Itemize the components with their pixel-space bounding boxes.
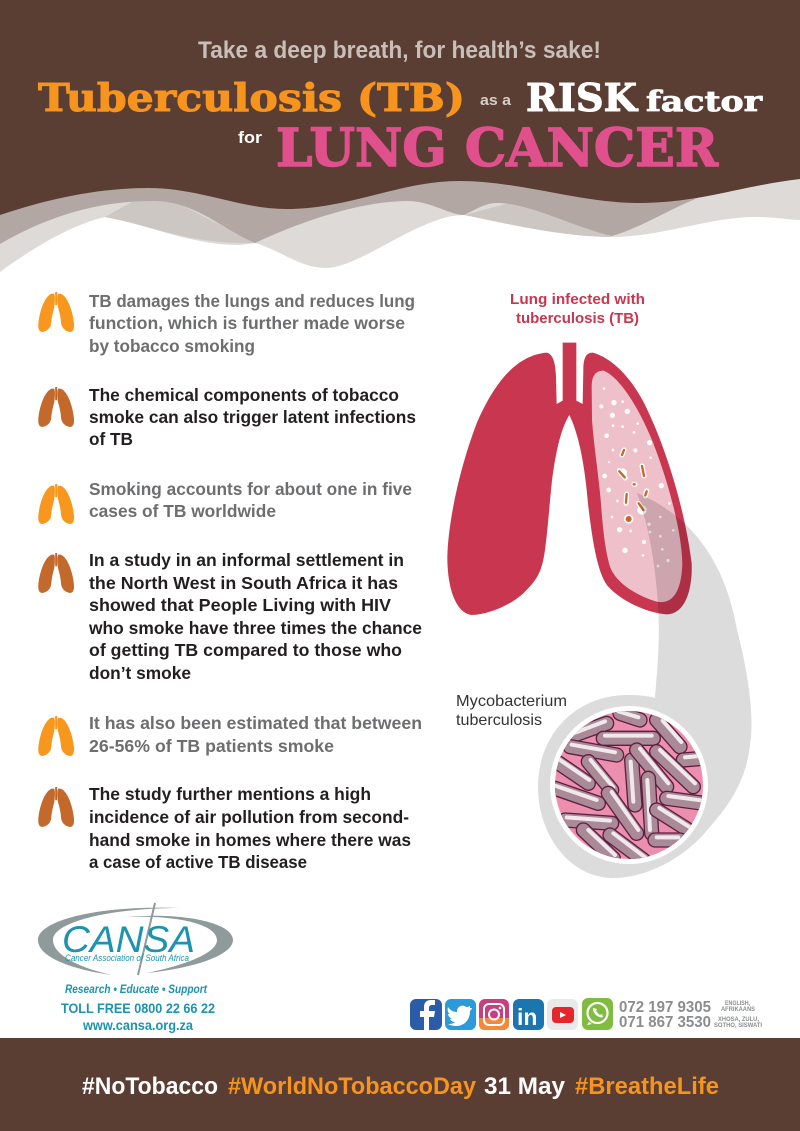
fact 1: function, which is further made worse bbox=[89, 313, 405, 333]
icon: lung 6 bbox=[38, 787, 74, 827]
contact numbers bbox=[619, 999, 762, 1031]
CANSA logo: www.cansa.org.za bbox=[82, 1017, 193, 1033]
footer hashtags: #BreatheLife bbox=[575, 1073, 719, 1100]
contact numbers: XHOSA, ZULU, bbox=[718, 1016, 759, 1023]
CANSA logo bbox=[38, 903, 233, 1033]
fact 4: don’t smoke bbox=[89, 663, 191, 683]
fact 4: of getting TB compared to those who bbox=[89, 640, 402, 660]
bacteria rods bbox=[555, 711, 703, 860]
fact 2: of TB bbox=[89, 429, 133, 449]
CANSA logo: CANSA bbox=[62, 919, 195, 960]
icon: lung 4 bbox=[38, 553, 74, 593]
title: LUNG CANCER bbox=[276, 118, 719, 179]
icon: twitter bbox=[445, 999, 476, 1030]
footer hashtags: #WorldNoTobaccoDay bbox=[228, 1073, 477, 1100]
icon: lung 1 bbox=[38, 292, 74, 332]
fact 2 bbox=[89, 385, 416, 449]
lung diagram heading: Lung infected with bbox=[510, 291, 645, 308]
contact numbers: AFRIKAANS bbox=[721, 1006, 756, 1013]
fact 3 bbox=[89, 479, 412, 521]
fact 5: 26-56% of TB patients smoke bbox=[89, 736, 334, 756]
fact 3: cases of TB worldwide bbox=[89, 501, 276, 521]
lung diagram heading bbox=[510, 291, 645, 327]
infected lung interior bbox=[592, 371, 682, 602]
icon: instagram bbox=[479, 999, 509, 1030]
icon: lung 3 bbox=[38, 484, 74, 524]
footer hashtags bbox=[82, 1073, 719, 1100]
fact 2: smoke can also trigger latent infections bbox=[89, 407, 416, 427]
fact 6: a case of active TB disease bbox=[89, 852, 307, 872]
footer hashtags: #NoTobacco bbox=[82, 1073, 218, 1100]
footer band bbox=[0, 1038, 800, 1131]
icon: lung 2 bbox=[38, 387, 74, 427]
header wave: medium layer bbox=[105, 190, 612, 243]
CANSA logo: Research • Educate • Support bbox=[65, 982, 208, 996]
bacteria label: Mycobacterium bbox=[456, 693, 567, 710]
icon: whatsapp bbox=[582, 998, 613, 1030]
header brown background bbox=[0, 0, 800, 215]
icon: youtube bbox=[547, 999, 578, 1030]
fact 1: TB damages the lungs and reduces lung bbox=[89, 291, 415, 311]
white spots bbox=[599, 387, 675, 567]
contact numbers: ENGLISH, bbox=[725, 1000, 750, 1007]
fact 2: The chemical components of tobacco bbox=[89, 385, 399, 405]
bacteria label: tuberculosis bbox=[456, 712, 542, 729]
infected lungs illustration bbox=[447, 343, 692, 615]
header wave: taupe layer bbox=[0, 0, 735, 244]
title: factor bbox=[646, 85, 764, 118]
subtitle: Take a deep breath, for health’s sake! bbox=[198, 37, 601, 64]
TB lesions bbox=[618, 450, 647, 524]
fact 5: It has also been estimated that between bbox=[89, 713, 422, 733]
magnification tail bbox=[538, 493, 751, 878]
fact 6: hand smoke in homes where there was bbox=[89, 830, 411, 850]
CANSA logo: Cancer Association of South Africa bbox=[65, 953, 189, 964]
contact numbers: 072 197 9305 bbox=[619, 999, 711, 1016]
contact numbers: SOTHO, SISWATI bbox=[714, 1022, 762, 1029]
bacteria label bbox=[456, 693, 567, 729]
magnified bacteria circle bbox=[550, 706, 708, 864]
lung diagram heading: tuberculosis (TB) bbox=[516, 310, 639, 327]
fact 4: who smoke have three times the chance bbox=[88, 618, 422, 638]
header wave: light layer bbox=[0, 0, 800, 272]
fact 4: In a study in an informal settlement in bbox=[89, 550, 404, 570]
contact numbers: 071 867 3530 bbox=[619, 1014, 711, 1031]
fact 1: by tobacco smoking bbox=[89, 336, 255, 356]
fact 6: incidence of air pollution from second- bbox=[89, 807, 409, 827]
fact 5 bbox=[89, 713, 422, 756]
title: RISK bbox=[526, 75, 639, 120]
CANSA logo: TOLL FREE 0800 22 66 22 bbox=[61, 1000, 215, 1016]
icon: lung 5 bbox=[38, 716, 74, 756]
title bbox=[38, 75, 764, 179]
icon: linkedin bbox=[513, 999, 544, 1030]
title: for bbox=[238, 128, 262, 147]
title: Tuberculosis (TB) bbox=[38, 75, 465, 120]
fact 3: Smoking accounts for about one in five bbox=[89, 479, 412, 499]
icon: facebook bbox=[410, 999, 442, 1030]
icon: linkedin: in bbox=[517, 1004, 537, 1030]
footer hashtags: 31 May bbox=[484, 1073, 566, 1100]
title: as a bbox=[480, 92, 512, 109]
fact 4 bbox=[88, 550, 422, 683]
fact 6: The study further mentions a high bbox=[89, 784, 371, 804]
fact 4: showed that People Living with HIV bbox=[89, 595, 391, 615]
fact 6 bbox=[89, 784, 411, 872]
fact 1 bbox=[89, 291, 415, 356]
fact 4: the North West in South Africa it has bbox=[89, 573, 398, 593]
